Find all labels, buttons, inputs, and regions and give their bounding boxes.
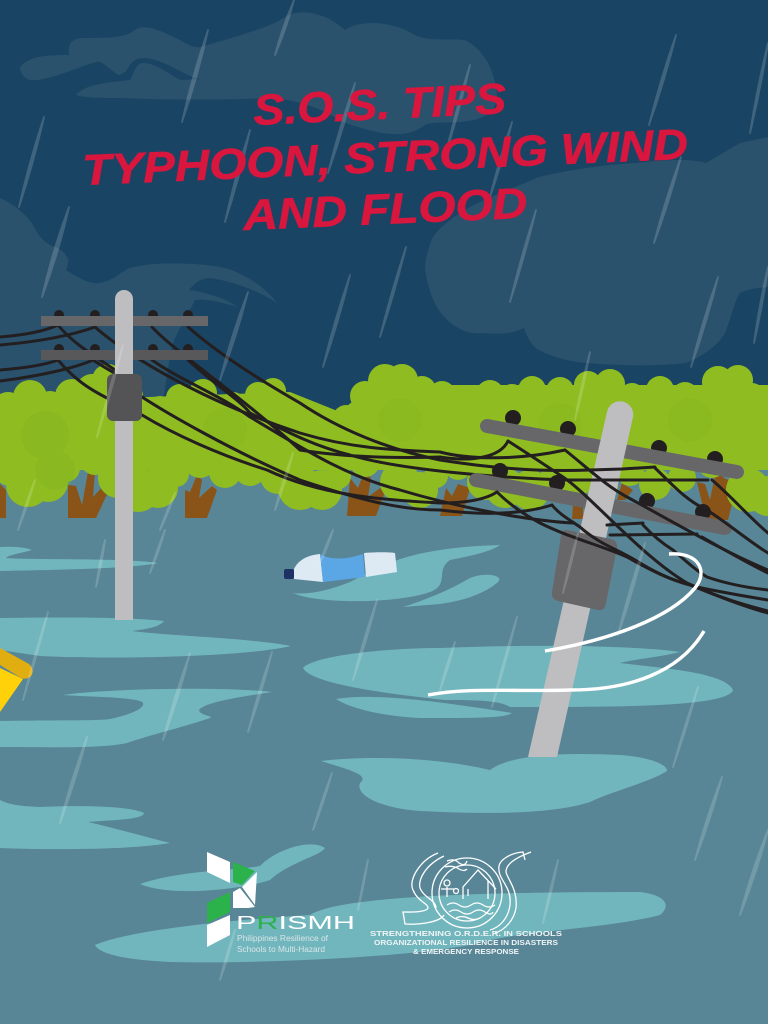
flood water [0, 468, 768, 1024]
PRISMH tagline [237, 934, 329, 954]
SOS caption: & EMERGENCY RESPONSE [413, 947, 519, 956]
right pole wires [497, 441, 768, 613]
title line 1: S.O.S. TIPS [252, 75, 508, 135]
left pole transformer box [107, 374, 142, 421]
title line 3: AND FLOOD [241, 180, 528, 240]
tree foliage shading [21, 398, 712, 490]
tree trunks [0, 470, 737, 520]
left pole shaft [115, 290, 133, 620]
SOS order logo [370, 852, 562, 956]
SOS caption: ORGANIZATIONAL RESILIENCE IN DISASTERS [374, 938, 558, 947]
PRISMH tagline: Philippines Resilience of [237, 934, 329, 943]
title line 2: TYPHOON, STRONG WIND [81, 121, 689, 195]
SOS caption: STRENGTHENING O.R.D.E.R. IN SCHOOLS [370, 929, 562, 938]
left pole insulators [54, 310, 193, 354]
puddles [0, 545, 733, 962]
PRISMH wordmark: P R ISMH [236, 913, 355, 933]
yellow bucket [0, 648, 33, 712]
right utility pole tilted [476, 401, 737, 757]
storm clouds [0, 12, 768, 420]
left pole crossarms [41, 316, 208, 360]
right pole crossarms [476, 426, 737, 528]
PRISMH logo mark [207, 852, 257, 947]
SOS emblem [403, 852, 531, 933]
floating plastic bottle [284, 552, 397, 582]
tree foliage [0, 364, 768, 516]
right pole insulators [492, 410, 723, 520]
right pole transformer box [552, 530, 617, 610]
title [81, 75, 689, 240]
SOS caption [370, 929, 562, 956]
sky background [0, 0, 768, 520]
right pole shaft [528, 401, 633, 757]
PRISMH logo [207, 852, 355, 954]
trees [0, 364, 768, 520]
loose white cables [428, 554, 704, 695]
left pole wires [0, 325, 590, 523]
PRISMH tagline: Schools to Multi-Hazard [237, 945, 325, 954]
left utility pole [41, 290, 208, 620]
